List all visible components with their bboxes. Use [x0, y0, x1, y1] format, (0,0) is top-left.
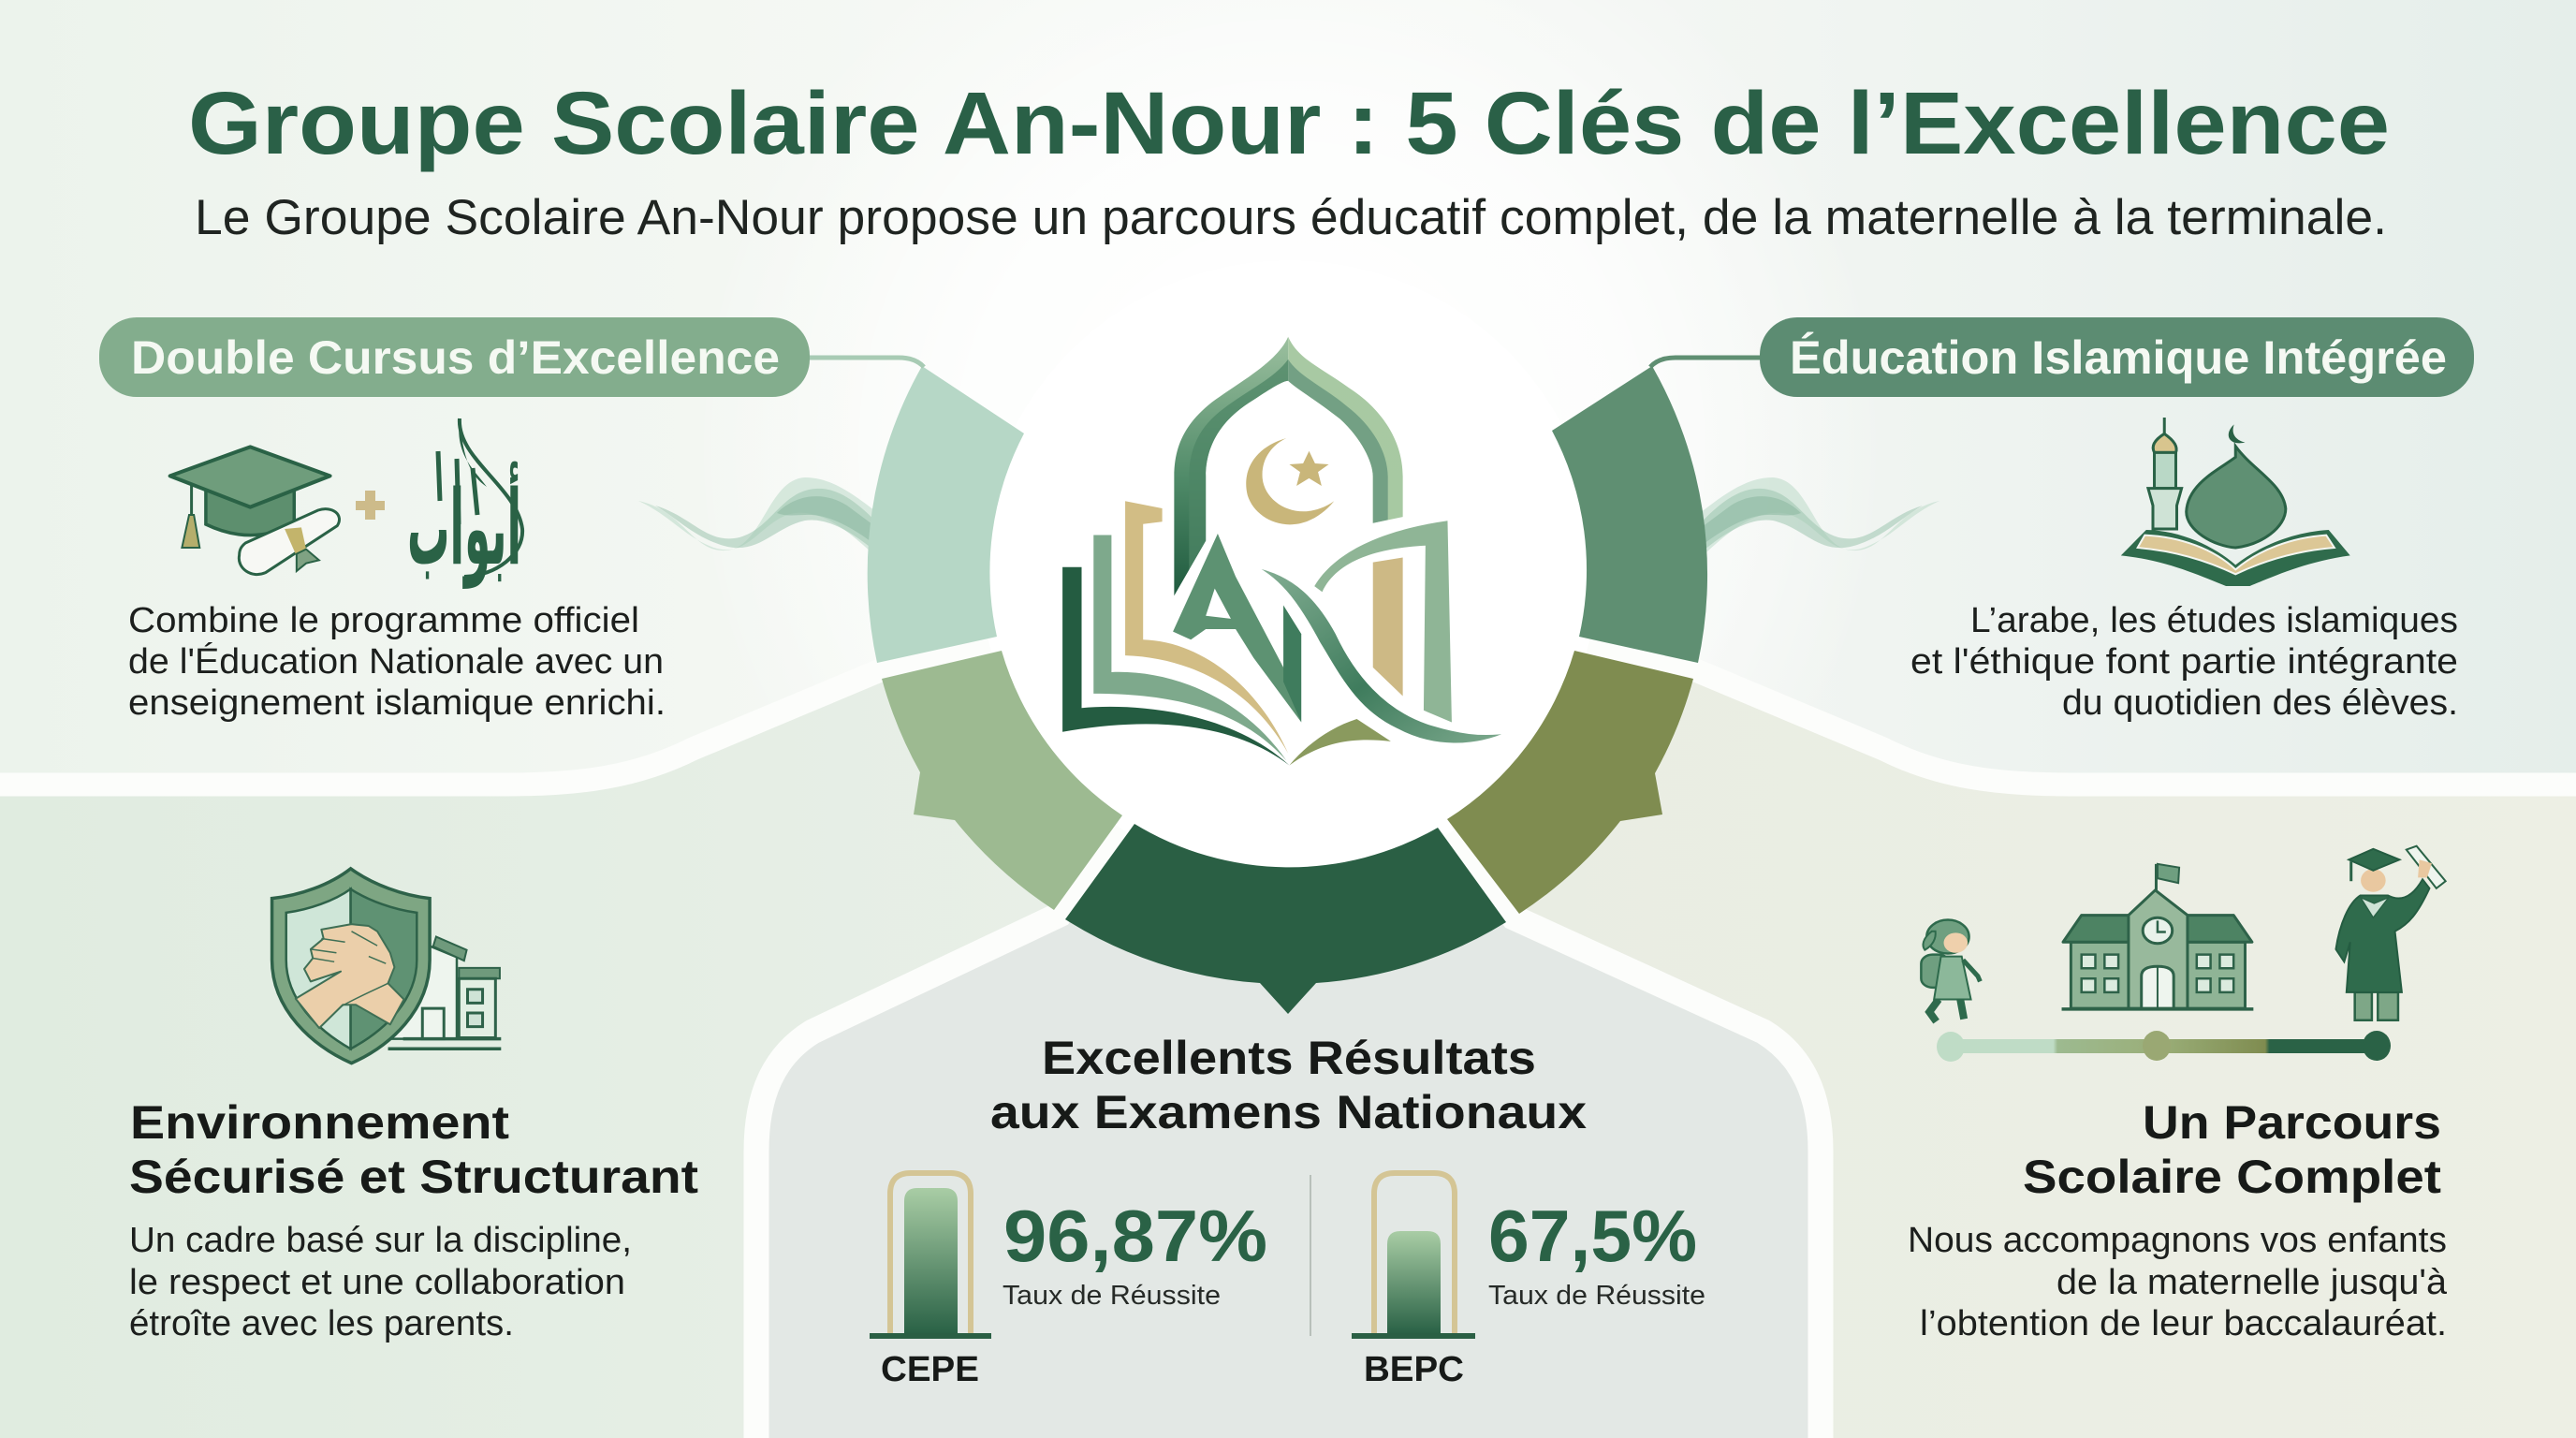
logo: crescent and star — [1246, 438, 1334, 524]
icon: arabic calligraphy — [407, 418, 522, 590]
text: parcours — [1908, 1221, 2448, 1343]
ring segment: environnement — [882, 651, 1122, 910]
pill heading left — [99, 317, 810, 397]
stat: 67,5% — [1488, 1195, 1705, 1311]
icon: shield, handshake and building — [272, 869, 501, 1064]
text: éducation islamique: L’arabe, les études islamiques — [1970, 601, 2458, 640]
ring segment: éducation islamique — [1552, 366, 1707, 663]
bar chart: BEPC — [1352, 1173, 1475, 1389]
connector line left — [805, 358, 924, 367]
central ring — [868, 260, 1707, 1014]
bar chart: CEPE — [870, 1173, 991, 1389]
text: éducation islamique — [1910, 601, 2458, 723]
text: parcours: Nous accompagnons vos enfants — [1908, 1221, 2447, 1260]
text: éducation islamique: et l'éthique font partie intégrante — [1910, 642, 2458, 682]
ring segment: double cursus — [868, 366, 1024, 663]
text: double cursus — [128, 601, 666, 723]
wave ribbon right — [1690, 477, 1939, 567]
logo — [1062, 337, 1510, 765]
pill heading right: Éducation Islamique Intégrée — [1790, 331, 2447, 384]
panel: parcours scolaire — [1908, 846, 2448, 1343]
ring segment: résultats — [1065, 824, 1506, 1014]
icon: child with backpack — [1921, 920, 1980, 1021]
connector line right — [1650, 358, 1764, 367]
icon: arabic calligraphy: أبواب — [407, 461, 521, 590]
icon: plus — [356, 491, 385, 520]
text: double cursus: Combine le programme officiel — [128, 601, 639, 640]
panel: résultats — [870, 1032, 1705, 1389]
heading: parcours: Un Parcours — [2143, 1096, 2441, 1149]
heading: environnement — [129, 1096, 698, 1203]
stat: 67,5%: Taux de Réussite — [1488, 1281, 1705, 1311]
heading: parcours — [2023, 1096, 2441, 1203]
timeline progress — [1937, 1031, 2391, 1062]
stat: 67,5%: 67,5% — [1488, 1195, 1697, 1277]
pill heading right — [1760, 317, 2474, 397]
stat: 96,87% — [1003, 1195, 1267, 1311]
heading: environnement: Environnement — [130, 1096, 509, 1149]
panel: environnement sécurisé — [129, 869, 698, 1343]
subtitle: Le Groupe Scolaire An-Nour propose un parcours éducatif complet, de la maternelle à la terminale. — [195, 190, 2387, 245]
text: parcours: l’obtention de leur baccalauréat. — [1920, 1304, 2447, 1343]
bar chart: BEPC: BEPC — [1364, 1350, 1464, 1389]
text: parcours: de la maternelle jusqu'à — [2056, 1263, 2448, 1302]
panel: double cursus — [99, 317, 924, 723]
heading: résultats: aux Examens Nationaux — [990, 1086, 1587, 1138]
wave ribbon left — [638, 477, 887, 567]
stat: 96,87%: Taux de Réussite — [1003, 1281, 1221, 1311]
text: environnement: le respect et une collaboration — [129, 1263, 625, 1302]
icon: graduate — [2335, 846, 2446, 1020]
stat: 96,87%: 96,87% — [1003, 1195, 1267, 1277]
pill heading left: Double Cursus d’Excellence — [131, 331, 780, 384]
logo: letters A N — [1173, 521, 1510, 744]
panel: éducation islamique — [1650, 317, 2474, 723]
title: Groupe Scolaire An-Nour : 5 Clés de l’Excellence — [188, 74, 2390, 173]
heading: environnement: Sécurisé et Structurant — [129, 1151, 698, 1203]
logo: book pages — [1062, 501, 1391, 765]
heading: parcours: Scolaire Complet — [2023, 1151, 2441, 1203]
text: double cursus: enseignement islamique enrichi. — [128, 683, 666, 723]
divider — [1310, 1175, 1311, 1336]
bar chart: CEPE: CEPE — [881, 1350, 979, 1389]
text: environnement — [129, 1221, 632, 1343]
heading: résultats: Excellents Résultats — [1042, 1032, 1536, 1084]
text: double cursus: de l'Éducation Nationale avec un — [128, 641, 664, 682]
text: environnement: Un cadre basé sur la discipline, — [129, 1221, 632, 1260]
icon: graduation cap and diploma — [170, 447, 339, 575]
panel background: parcours — [1514, 667, 2576, 1438]
white dividers — [0, 641, 2576, 1438]
logo: arch — [1174, 337, 1403, 595]
text: éducation islamique: du quotidien des élèves. — [2062, 683, 2458, 723]
panel background: environnement — [0, 667, 1060, 1438]
text: environnement: étroîte avec les parents. — [129, 1304, 514, 1343]
ring segment: parcours — [1447, 651, 1693, 914]
heading: résultats — [990, 1032, 1587, 1138]
panel background: résultats — [756, 915, 1821, 1438]
icon: school building — [2062, 864, 2253, 1009]
icon: mosque and book — [2121, 418, 2350, 586]
